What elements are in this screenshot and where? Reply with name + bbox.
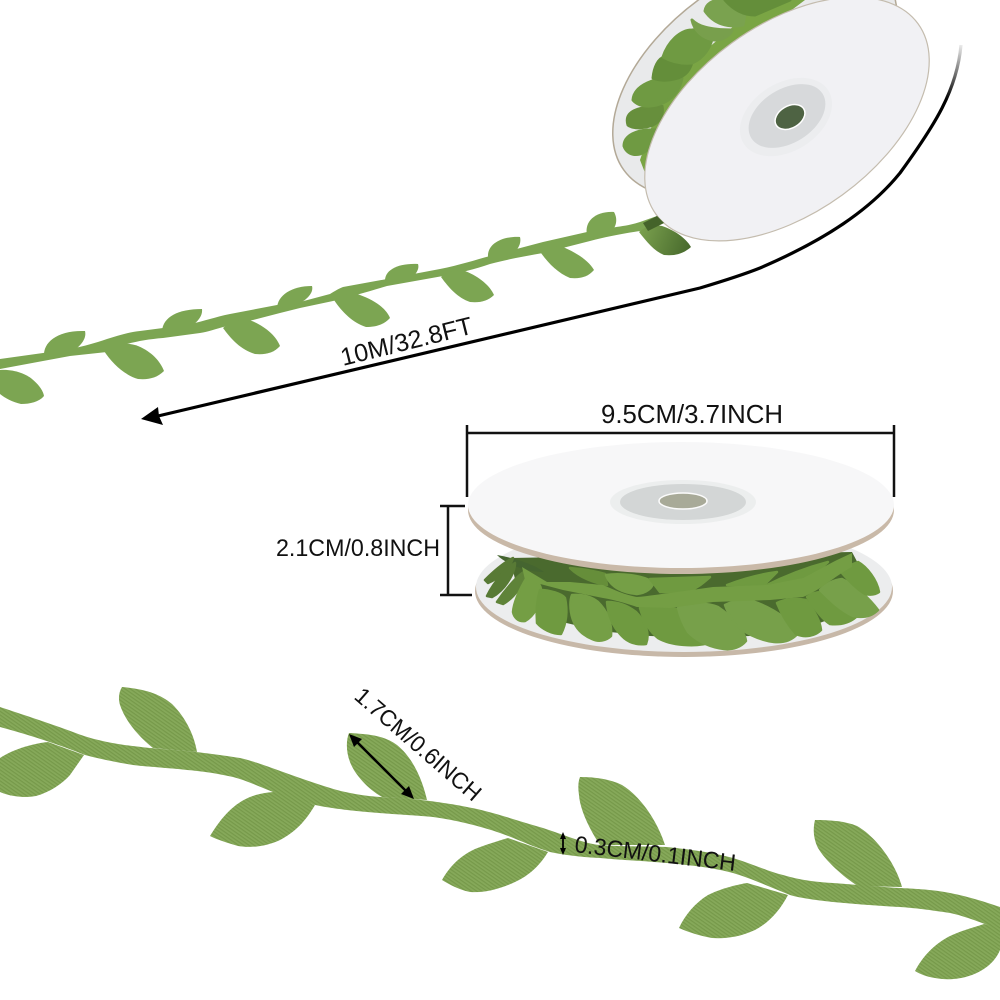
stem xyxy=(0,707,1000,930)
hub of top spool xyxy=(726,62,846,172)
stem width measurement xyxy=(560,831,737,876)
top spool with ribbon wound xyxy=(569,0,973,290)
leaf 7 xyxy=(679,883,788,938)
height dimension bracket xyxy=(276,506,472,595)
top vine ribbon xyxy=(0,212,691,404)
leaf 8 xyxy=(814,820,902,887)
height label: 2.1CM/0.8INCH xyxy=(276,535,440,562)
bracket lines xyxy=(467,425,894,497)
width label: 9.5CM/3.7INCH xyxy=(601,399,783,429)
bracket lines xyxy=(440,506,472,595)
arrowhead xyxy=(141,407,163,425)
vine stem xyxy=(0,216,664,369)
leaf 2 xyxy=(0,742,84,797)
double arrow on stem xyxy=(560,832,566,855)
bottom flange xyxy=(475,525,893,657)
length label: 10M/32.8FT xyxy=(338,312,475,372)
small upward leaves xyxy=(44,212,616,356)
large vine close-up xyxy=(0,687,1000,979)
double arrow on leaf xyxy=(349,734,414,799)
stem width label: 0.3CM/0.1INCH xyxy=(573,831,737,876)
wound leaves on top spool xyxy=(624,0,805,178)
back flange of top spool xyxy=(569,0,941,246)
wound leaves xyxy=(485,552,879,649)
middle spool xyxy=(468,442,894,657)
hub xyxy=(610,480,756,524)
curved length line xyxy=(158,45,961,416)
leaf length label: 1.7CM/0.6INCH xyxy=(350,682,487,806)
leaf 4 xyxy=(210,792,315,847)
ribbon stem on spool xyxy=(522,553,852,608)
small downward leaves xyxy=(0,225,691,404)
dark stem end xyxy=(643,216,664,231)
leaf 1 xyxy=(119,687,197,752)
leaf 6 xyxy=(578,777,665,845)
leaf 5 xyxy=(442,838,548,892)
top flange xyxy=(468,446,894,574)
leaf 9 xyxy=(915,924,1000,979)
front flange of top spool xyxy=(601,0,973,290)
leaf 3, measured leaf xyxy=(347,733,427,800)
width dimension bracket xyxy=(467,399,894,497)
length arrow 10M xyxy=(141,45,961,425)
leaf length measurement xyxy=(349,682,487,806)
